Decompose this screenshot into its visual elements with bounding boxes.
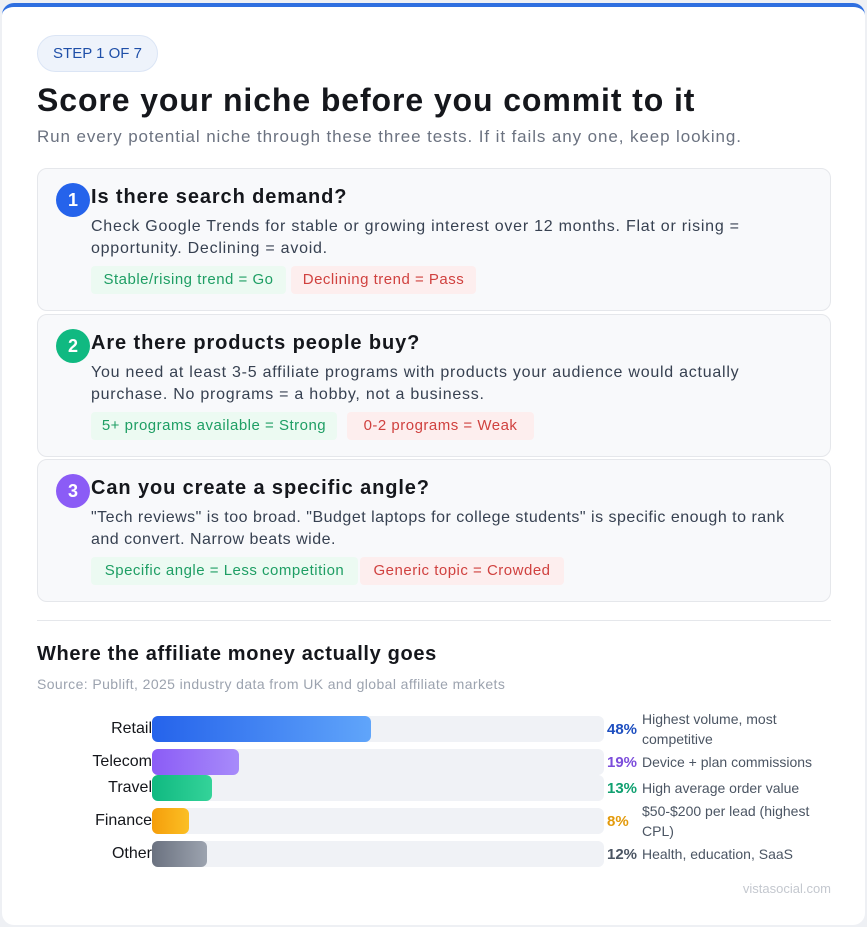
row other: 12% bbox=[607, 846, 637, 863]
row travel: Travel bbox=[108, 779, 152, 796]
icon: number 3: 3 bbox=[68, 481, 78, 501]
body 2 bbox=[91, 364, 739, 403]
icon: number 1: 1 bbox=[68, 190, 78, 210]
pill weak bbox=[347, 412, 534, 440]
pill pass: Declining trend = Pass bbox=[303, 271, 464, 288]
row telecom bbox=[92, 749, 812, 775]
row retail: Retail bbox=[111, 720, 152, 737]
panel: test 1 bbox=[37, 168, 831, 311]
pill strong bbox=[91, 412, 337, 440]
body 3: and convert. Narrow beats wide. bbox=[91, 531, 336, 548]
bar chart bbox=[92, 711, 812, 867]
subtitle: Run every potential niche through these three tests. If it fails any one, keep looking. bbox=[37, 127, 742, 146]
row telecom: Device + plan commissions bbox=[642, 754, 812, 770]
row travel: High average order value bbox=[642, 780, 799, 796]
row travel: 13% bbox=[607, 780, 637, 797]
body 1: Check Google Trends for stable or growing interest over 12 months. Flat or rising = bbox=[91, 218, 740, 235]
footer brand: vistasocial.com bbox=[743, 881, 831, 896]
body 2: purchase. No programs = a hobby, not a business. bbox=[91, 386, 485, 403]
row finance: Finance bbox=[95, 812, 152, 829]
chart source: Source: Publift, 2025 industry data from UK and global affiliate markets bbox=[37, 676, 505, 692]
row travel bbox=[108, 775, 799, 801]
row other bbox=[112, 841, 793, 867]
icon: number 3 bbox=[56, 474, 90, 508]
row retail bbox=[111, 711, 777, 747]
body 3 bbox=[91, 509, 785, 548]
pill generic bbox=[360, 557, 564, 585]
body 1: opportunity. Declining = avoid. bbox=[91, 240, 328, 257]
pill weak: 0-2 programs = Weak bbox=[364, 417, 517, 434]
icon: number 1 bbox=[56, 183, 90, 217]
pill strong: 5+ programs available = Strong bbox=[102, 417, 326, 434]
heading 3: Can you create a specific angle? bbox=[91, 477, 430, 499]
row finance: 8% bbox=[607, 813, 629, 830]
pill pass bbox=[291, 266, 476, 294]
row telecom: 19% bbox=[607, 754, 637, 771]
pill specific: Specific angle = Less competition bbox=[105, 562, 344, 579]
row telecom: Telecom bbox=[92, 753, 152, 770]
body 1 bbox=[91, 218, 740, 257]
row retail: 48% bbox=[607, 721, 637, 738]
row other: Health, education, SaaS bbox=[642, 846, 793, 862]
row finance bbox=[95, 803, 810, 839]
pill go bbox=[91, 266, 286, 294]
panel: test 3 bbox=[37, 459, 831, 602]
heading 1: Is there search demand? bbox=[91, 186, 347, 208]
pill specific bbox=[91, 557, 358, 585]
chart title: Where the affiliate money actually goes bbox=[37, 643, 437, 665]
row finance: $50-$200 per lead (highest CPL) bbox=[642, 803, 809, 839]
row retail: Highest volume, most competitive bbox=[642, 711, 777, 747]
icon: number 2: 2 bbox=[68, 336, 78, 356]
badge: step: STEP 1 OF 7 bbox=[53, 45, 142, 62]
panel: test 2 bbox=[37, 314, 831, 457]
badge: step bbox=[37, 35, 158, 72]
row other: Other bbox=[112, 845, 152, 862]
heading 2: Are there products people buy? bbox=[91, 332, 420, 354]
icon: number 2 bbox=[56, 329, 90, 363]
pill go: Stable/rising trend = Go bbox=[103, 271, 274, 288]
title: Score your niche before you commit to it bbox=[37, 82, 695, 118]
pill generic: Generic topic = Crowded bbox=[374, 562, 550, 579]
body 3: "Tech reviews" is too broad. "Budget laptops for college students" is specific enough to rank bbox=[91, 509, 785, 526]
body 2: You need at least 3-5 affiliate programs with products your audience would actually bbox=[91, 364, 739, 381]
